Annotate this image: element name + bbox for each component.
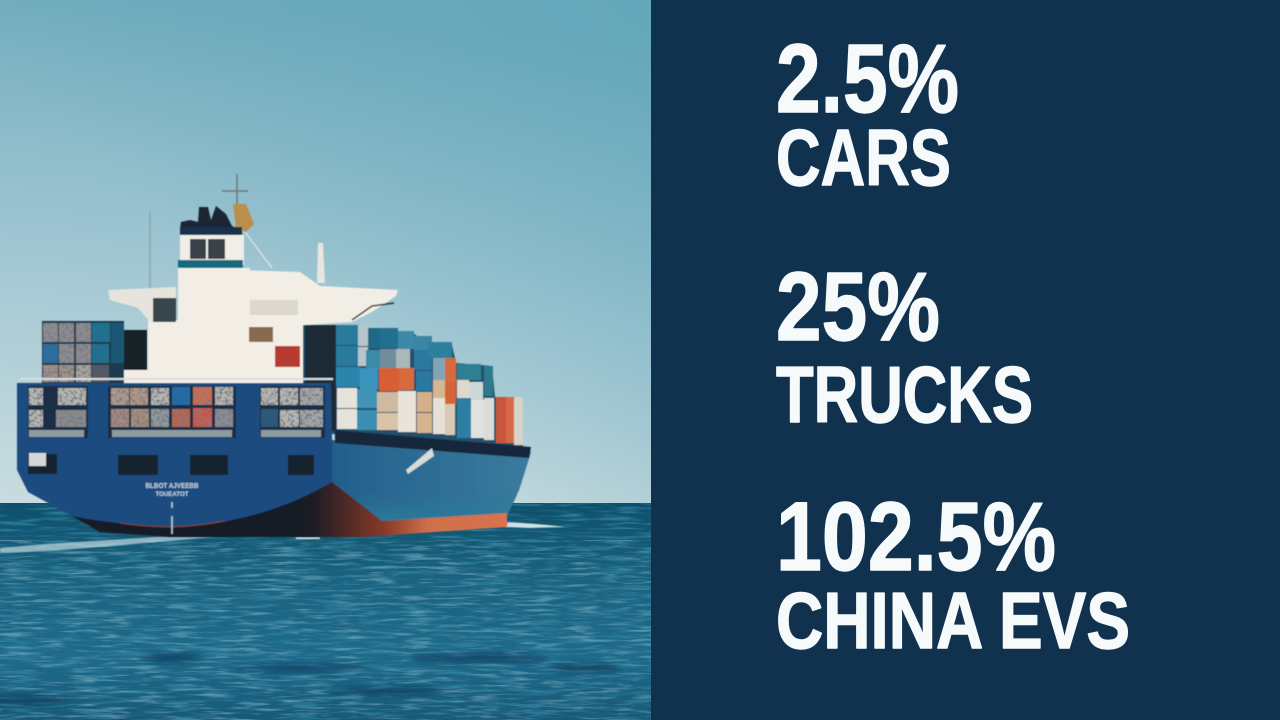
sky xyxy=(0,0,651,503)
stat: cars xyxy=(776,24,959,202)
forward deck band xyxy=(335,430,531,458)
panel: statistics xyxy=(651,0,1280,720)
anchor pocket xyxy=(406,448,434,474)
port of registry: TOUEATOT xyxy=(156,492,189,498)
boot topping xyxy=(72,482,507,537)
sea xyxy=(0,503,651,720)
stern rail xyxy=(20,378,333,380)
stat: trucks xyxy=(776,252,1033,439)
label: CHINA EVS xyxy=(776,576,1130,665)
panel: ship photo xyxy=(0,0,651,720)
bridge tower xyxy=(178,227,250,383)
label: TRUCKS xyxy=(776,350,1033,439)
red waterline accent xyxy=(120,521,225,527)
value: 25% xyxy=(776,252,940,361)
container ship xyxy=(17,174,531,537)
ship name: BLBOT AJVEEBB xyxy=(146,483,198,490)
mast and antennas xyxy=(150,174,325,300)
value: 2.5% xyxy=(776,24,959,133)
value: 102.5% xyxy=(776,482,1056,591)
draught marks xyxy=(171,502,173,534)
forward container stacks xyxy=(303,325,523,447)
stat: china evs xyxy=(776,482,1130,665)
hull openings xyxy=(28,453,314,475)
label: CARS xyxy=(776,113,951,202)
stern deck container stack xyxy=(42,321,124,384)
funnel top xyxy=(180,204,254,232)
hull xyxy=(17,383,531,537)
wake xyxy=(0,522,565,553)
stern container bays xyxy=(28,386,325,438)
superstructure xyxy=(108,268,398,383)
